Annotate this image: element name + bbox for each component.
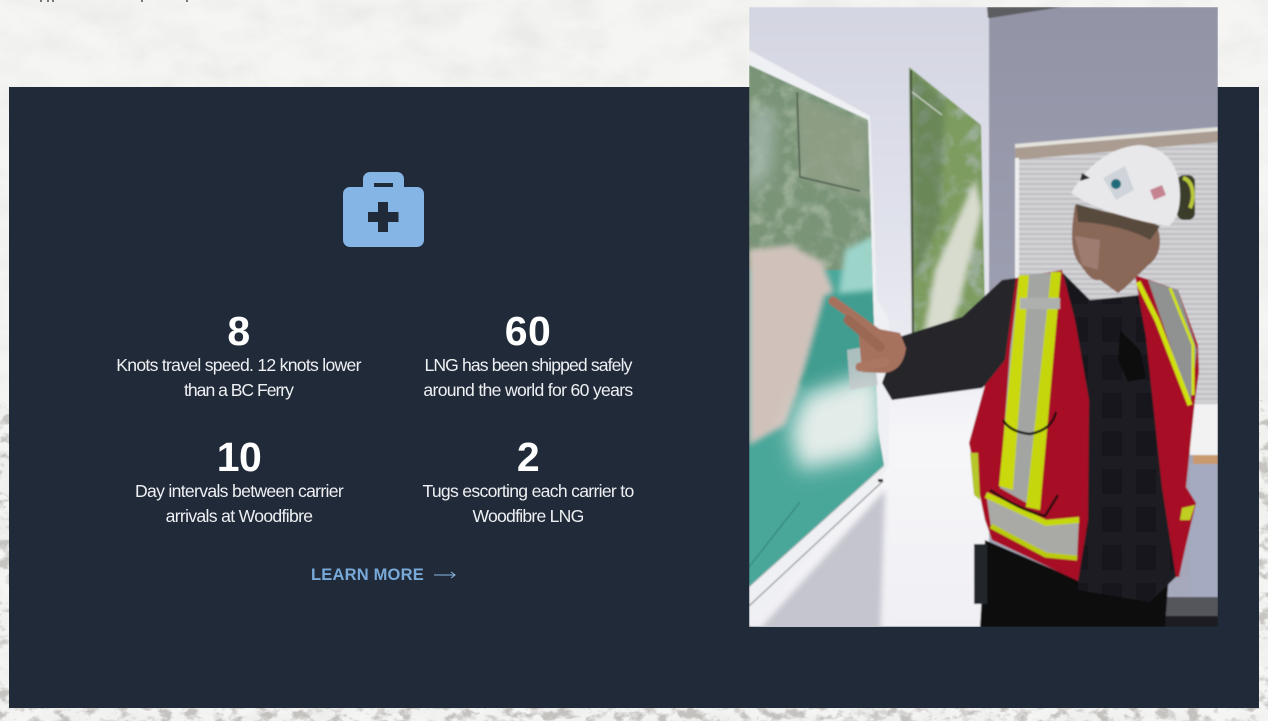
hand (833, 301, 906, 373)
safety vest right panel (1118, 275, 1199, 577)
link: learn more: LEARN MORE (311, 566, 424, 584)
cut-off text line at top edge (40, 0, 188, 2)
stat: 8 knots (116, 308, 362, 400)
room walls (749, 7, 1218, 640)
stat: 60 years (423, 308, 633, 400)
text: arrivals at Woodfibre (166, 506, 312, 526)
stat: 2 tugs (422, 434, 634, 526)
text: Woodfibre LNG (472, 506, 584, 526)
text: around the world for 60 years (423, 380, 633, 400)
text: Knots travel speed. 12 knots lower (116, 355, 361, 375)
photo: worker in hard hat pointing at wall maps (749, 7, 1218, 627)
sleeve (882, 278, 1016, 400)
text: 8 (227, 308, 250, 354)
text: Day intervals between carrier (135, 481, 343, 501)
safety vest left panel (969, 270, 1089, 581)
hard hat (1071, 145, 1195, 226)
second map on the wall (908, 66, 986, 334)
arrow (434, 572, 456, 578)
worker lower body (974, 530, 1170, 627)
text: LNG has been shipped safely (424, 355, 632, 375)
first map on the wall (749, 50, 889, 622)
window with blinds (1015, 127, 1218, 627)
stat: 10 day intervals (135, 434, 344, 526)
text: Tugs escorting each carrier to (422, 481, 634, 501)
text: 60 (505, 308, 551, 354)
icon: medical kit (343, 172, 424, 247)
plaid shirt (1062, 272, 1178, 602)
head (1072, 204, 1160, 293)
text: than a BC Ferry (184, 380, 293, 400)
text: 10 (217, 434, 261, 480)
text: 2 (517, 434, 539, 480)
